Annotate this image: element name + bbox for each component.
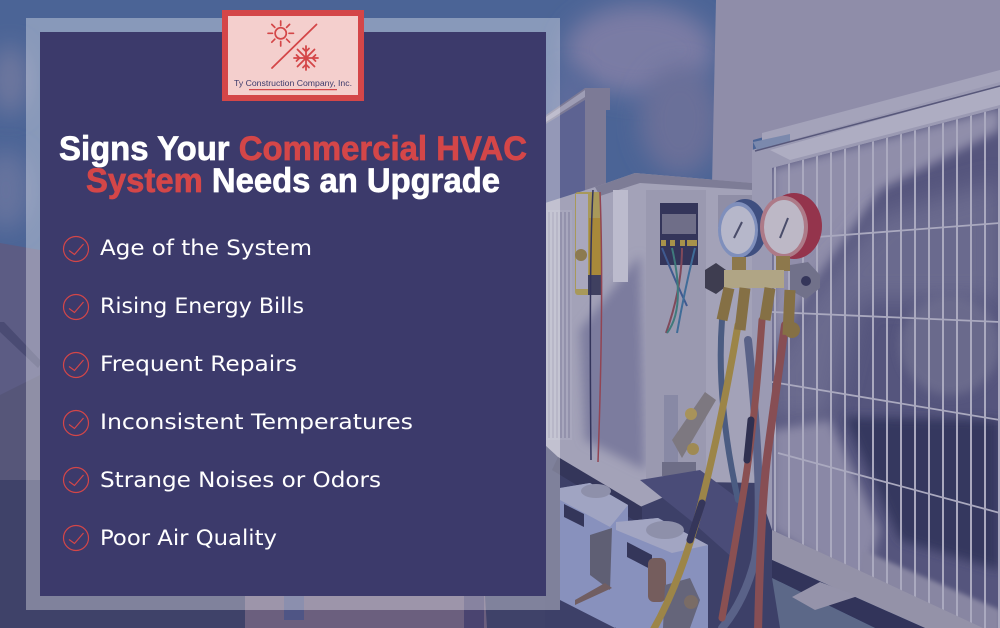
logo underline [249,89,337,91]
item: rising energy bills: Rising Energy Bills [100,294,304,318]
checklist [64,236,413,550]
title line 1: Signs Your Commercial HVAC [59,130,527,168]
item: frequent repairs: Frequent Repairs [100,352,297,376]
grille wires [772,100,1000,628]
large condenser unit grille [752,70,1000,628]
icon: diagonal slash [272,24,316,68]
manifold body and knobs [705,256,820,338]
title [59,130,527,200]
electrical disconnect boxes [560,483,708,628]
item: age of the system: Age of the System [100,236,312,260]
title line 2: System Needs an Upgrade [86,162,500,200]
rail and ground along the units [552,457,925,628]
building wall [712,0,1000,190]
logo badge [222,10,364,101]
yellow multimeter [575,190,602,462]
manifold gauges [705,193,822,338]
item: strange noises or odors: Strange Noises or Odors [100,468,381,492]
icon: sun [268,21,294,46]
valve assembly on the unit [662,392,716,476]
logo text: Ty Construction Company, Inc. [234,78,352,88]
wiring box [660,203,698,333]
fan and shadow behind grille [772,108,1000,628]
unit bottom frame [772,530,983,628]
icon: snowflake [294,46,318,70]
navy content panel [40,32,546,596]
rooftop post [545,88,610,203]
item: poor air quality: Poor Air Quality [100,526,277,550]
left rooftop wall and ground [0,243,42,480]
item: inconsistent temperatures: Inconsistent Temperatures [100,410,413,434]
translucent outer frame [26,18,560,610]
worker at the bottom [245,596,487,628]
ground and roof base [0,440,780,628]
refrigerant hoses [652,320,785,628]
red gauge [760,193,822,259]
middle condenser unit [545,173,765,507]
blue gauge [718,199,767,258]
